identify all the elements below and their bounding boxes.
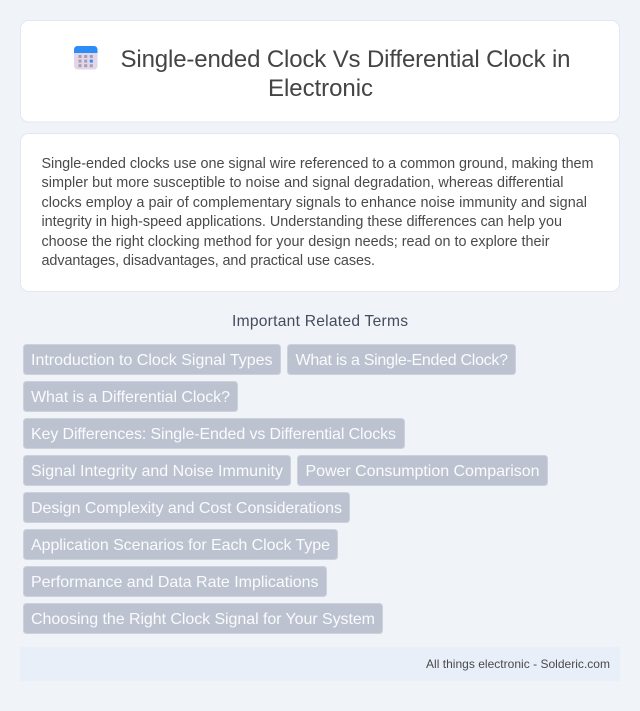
tag: what is a differential clock: What is a Differential Clock? — [31, 389, 230, 406]
text block: introduction paragraph: simpler but more susceptible to noise and signal degradation, whereas differential — [42, 175, 564, 191]
text block: introduction paragraph: Single-ended clocks use one signal wire referenced to a common ground, making them — [42, 156, 594, 172]
tag: what is a differential clock — [24, 382, 238, 412]
footer: All things electronic - Solderic.com — [426, 657, 610, 671]
footer — [20, 647, 620, 681]
tag: what is a single-ended clock — [288, 344, 516, 374]
icon: calendar — [74, 46, 98, 70]
tag: introduction to clock signal types: Introduction to Clock Signal Types — [31, 352, 272, 369]
tag: choosing the right clock signal: Choosing the Right Clock Signal for Your System — [31, 611, 375, 628]
tag: performance and data rate implications — [24, 566, 326, 596]
tag: design complexity and cost considerations: Design Complexity and Cost Considerations — [31, 500, 342, 517]
text block: introduction paragraph — [42, 156, 594, 269]
text block: introduction paragraph: integrity in high-speed applications. Understanding these differences can help you — [42, 214, 562, 230]
tag: power consumption comparison: Power Consumption Comparison — [306, 463, 540, 480]
tag: design complexity and cost considerations — [24, 492, 350, 522]
tag: key differences: Key Differences: Single-Ended vs Differential Clocks — [31, 426, 396, 443]
title: Electronic — [268, 75, 373, 102]
tag: signal integrity and noise immunity: Signal Integrity and Noise Immunity — [31, 463, 283, 480]
text block: introduction paragraph: clocks employ a pair of complementary signals to enhance noise immunity and signal — [42, 195, 587, 211]
tag: signal integrity and noise immunity — [24, 456, 290, 486]
tag: introduction to clock signal types — [24, 344, 280, 374]
tag: what is a single-ended clock: What is a Single-Ended Clock? — [296, 352, 508, 369]
tag: application scenarios: Application Scenarios for Each Clock Type — [31, 537, 330, 554]
tag: application scenarios — [24, 530, 338, 560]
tag: key differences — [24, 418, 404, 448]
title — [120, 46, 570, 102]
heading: important related terms: Important Related Terms — [232, 313, 408, 330]
tag: choosing the right clock signal — [24, 604, 382, 634]
tag: power consumption comparison — [298, 456, 548, 486]
panel: introduction — [20, 134, 620, 292]
text block: introduction paragraph: advantages, disadvantages, and practical use cases. — [42, 253, 375, 269]
panel: header — [20, 20, 620, 122]
text block: introduction paragraph: choose the right clocking method for your design needs; read on to explore their — [42, 234, 550, 250]
tag: performance and data rate implications: Performance and Data Rate Implications — [31, 574, 318, 591]
title: Single-ended Clock Vs Differential Clock in — [120, 46, 570, 73]
